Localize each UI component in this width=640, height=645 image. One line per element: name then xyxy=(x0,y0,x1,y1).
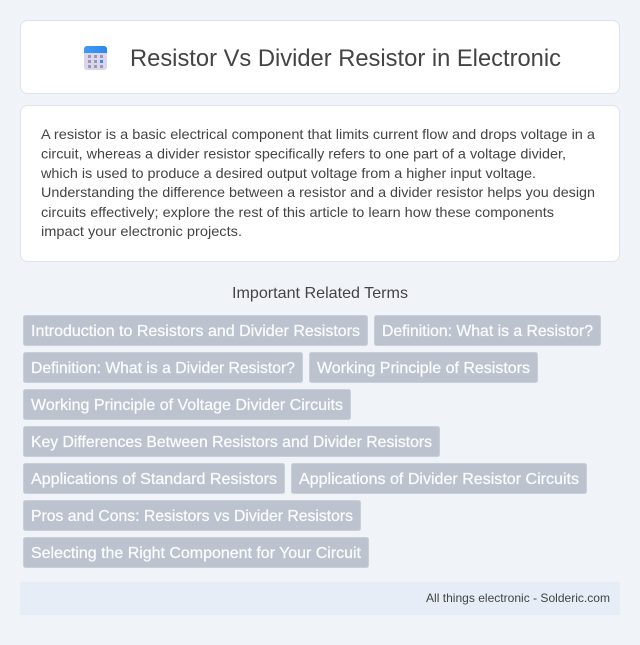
tag: definition resistor xyxy=(374,316,600,346)
footer xyxy=(20,582,620,615)
tag: applications divider xyxy=(292,464,586,494)
panel: intro paragraph xyxy=(20,106,620,262)
title: Resistor Vs Divider Resistor in Electronic xyxy=(130,45,561,72)
tag: introduction: Introduction to Resistors and Divider Resistors xyxy=(31,323,360,340)
tag: introduction xyxy=(24,316,368,346)
panel: intro paragraph: A resistor is a basic electrical component that limits current flow and drops voltage in a xyxy=(41,126,595,142)
tag: definition resistor: Definition: What is a Resistor? xyxy=(382,323,593,340)
tag: working principle divider: Working Principle of Voltage Divider Circuits xyxy=(31,397,343,414)
panel: intro paragraph: Understanding the difference between a resistor and a divider resistor helps you design xyxy=(41,184,595,200)
tag: selecting component xyxy=(24,538,368,568)
icon: calendar xyxy=(84,46,107,70)
tag: applications standard: Applications of Standard Resistors xyxy=(31,471,277,488)
tag list xyxy=(24,316,600,568)
tag: pros and cons: Pros and Cons: Resistors vs Divider Resistors xyxy=(31,508,353,525)
tag: applications divider: Applications of Divider Resistor Circuits xyxy=(299,471,579,488)
tag: applications standard xyxy=(24,464,284,494)
tag: definition divider: Definition: What is a Divider Resistor? xyxy=(31,360,295,377)
panel: intro paragraph: circuit, whereas a divider resistor specifically refers to one part of a voltage divider, xyxy=(41,146,566,162)
tag: definition divider xyxy=(24,352,302,382)
panel: intro paragraph: which is used to produce a desired output voltage from a higher input voltage. xyxy=(40,165,536,181)
tag: working principle resistors xyxy=(310,352,538,382)
tag: working principle resistors: Working Principle of Resistors xyxy=(317,360,530,377)
tag: working principle divider xyxy=(24,390,350,420)
footer: All things electronic - Solderic.com xyxy=(426,591,610,605)
heading: related terms: Important Related Terms xyxy=(232,285,408,302)
tag: selecting component: Selecting the Right Component for Your Circuit xyxy=(31,545,362,562)
tag: key differences xyxy=(24,426,440,456)
tag: key differences: Key Differences Between Resistors and Divider Resistors xyxy=(31,434,432,451)
tag: pros and cons xyxy=(24,500,360,530)
header panel xyxy=(20,20,620,94)
panel: intro paragraph: circuits effectively; explore the rest of this article to learn how these components xyxy=(41,204,554,220)
panel: intro paragraph: impact your electronic projects. xyxy=(41,223,242,239)
